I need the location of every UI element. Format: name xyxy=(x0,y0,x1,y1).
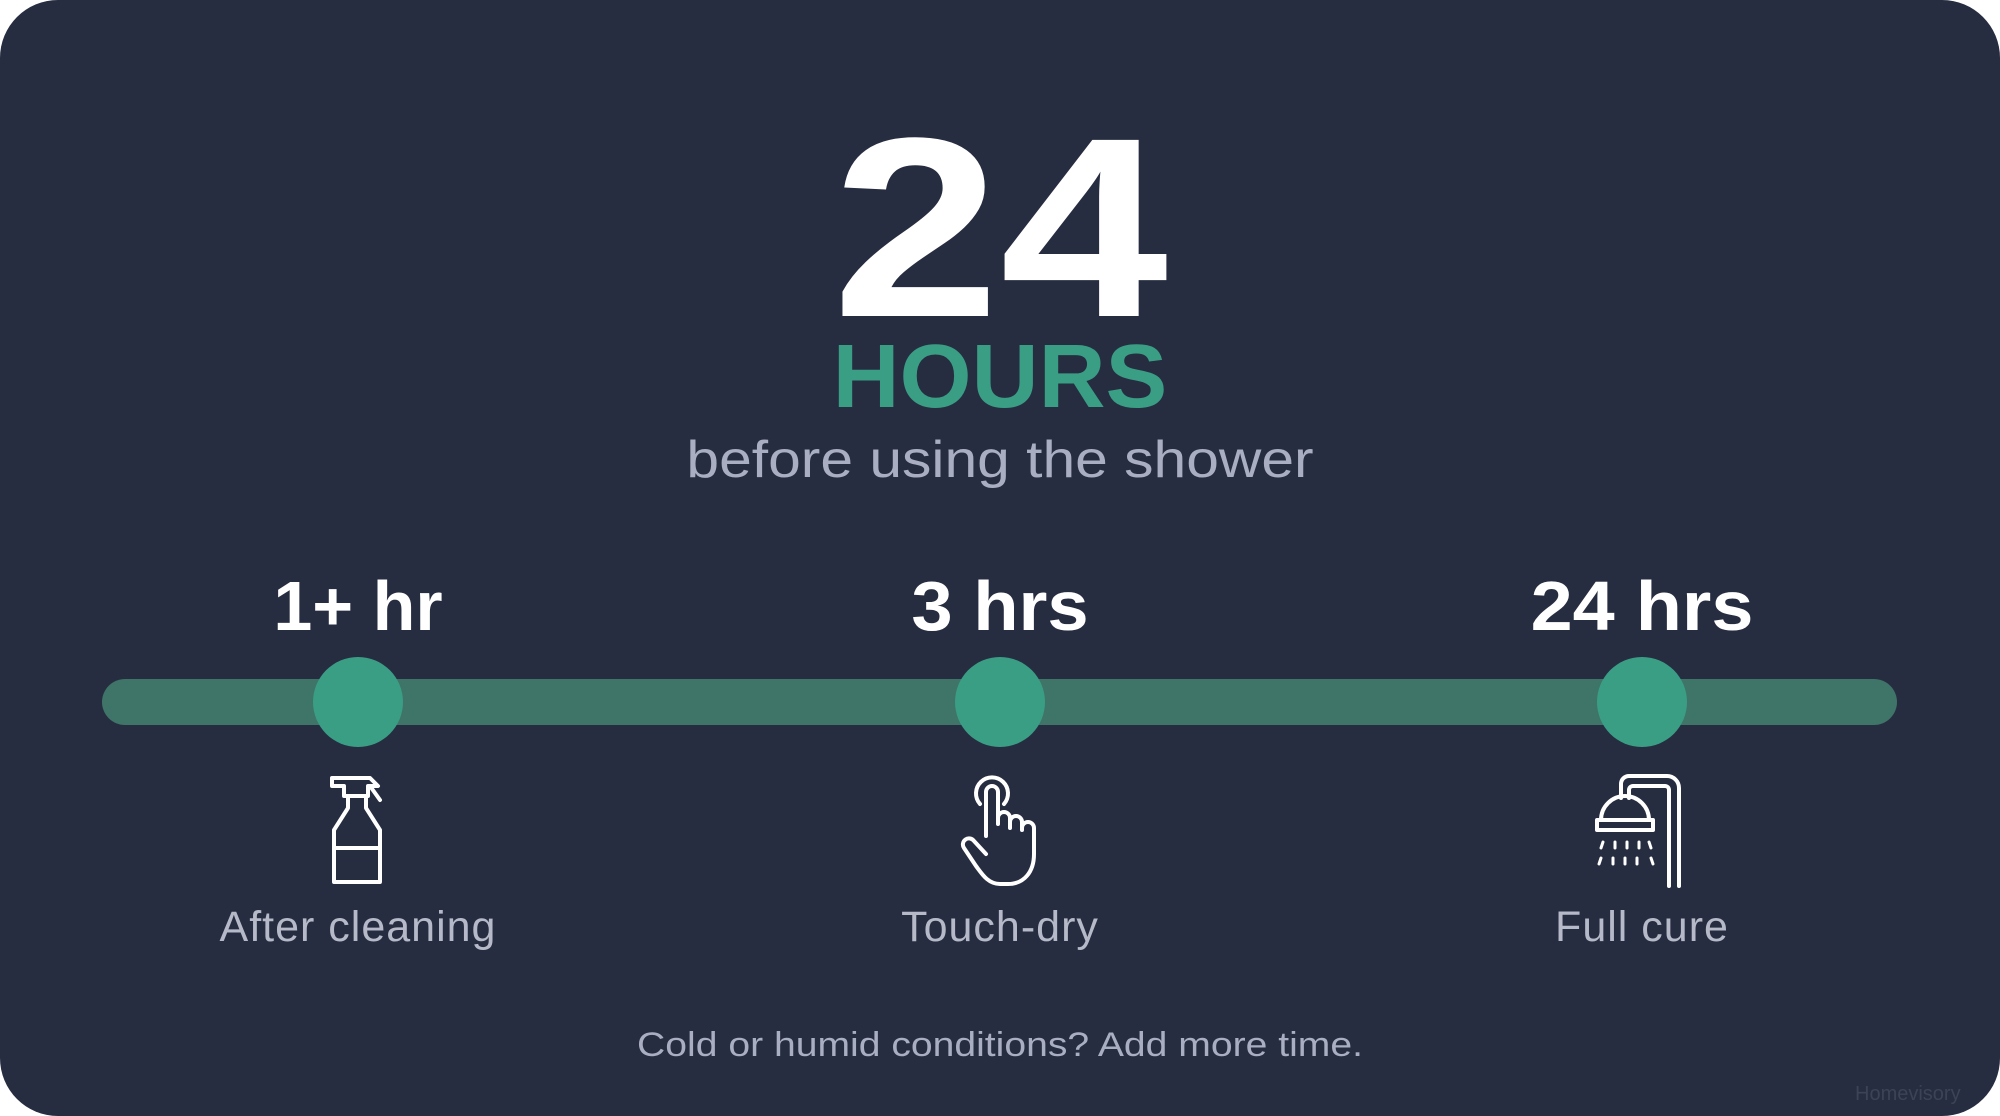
marker 3 xyxy=(1597,657,1687,747)
label: 24 hrs: 24 hrs xyxy=(1531,567,1753,645)
footer note: Cold or humid conditions? Add more time. xyxy=(637,1026,1363,1064)
label: 3 hrs: 3 hrs xyxy=(911,567,1089,645)
caption: Full cure: Full cure xyxy=(1555,903,1729,951)
caption: Touch-dry: Touch-dry xyxy=(901,903,1099,951)
caption: After cleaning: After cleaning xyxy=(220,903,496,951)
label: 1+ hr: 1+ hr xyxy=(273,567,443,645)
icon: shower xyxy=(1595,774,1681,888)
title: 24: 24 xyxy=(832,85,1168,371)
icon: spray bottle xyxy=(330,776,382,884)
subtitle: before using the shower xyxy=(686,431,1314,489)
marker 1 xyxy=(313,657,403,747)
timeline track xyxy=(102,679,1897,725)
icon: finger touch xyxy=(960,775,1036,886)
heading: HOURS: HOURS xyxy=(833,327,1167,427)
watermark: Homevisory xyxy=(1855,1083,1961,1105)
marker 2 xyxy=(955,657,1045,747)
